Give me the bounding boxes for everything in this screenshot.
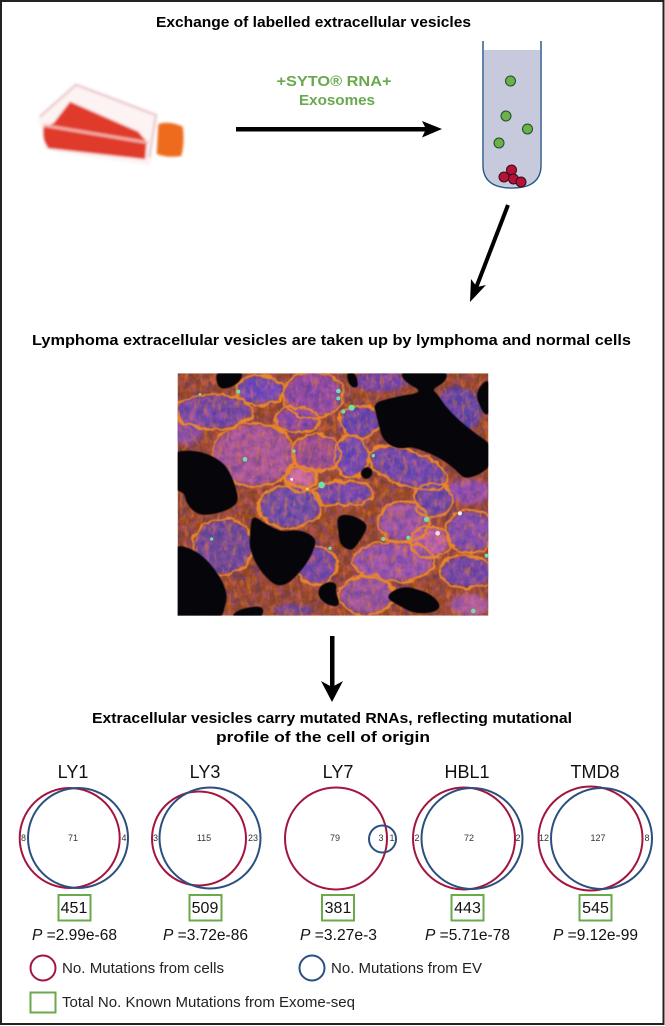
heading: mutated RNAs: Extracellular vesicles carry mutated RNAs, reflecting mutational	[92, 710, 572, 727]
venn diagram: LY3: 115	[197, 833, 211, 843]
venn diagram: LY7: 3	[378, 833, 384, 843]
venn diagram: LY3: 23	[248, 833, 258, 843]
panel: LY1: P =2.99e-68	[32, 927, 117, 944]
legend: exome-seq: Total No. Known Mutations from Exome-seq	[62, 994, 355, 1011]
arrow: micrograph to results	[321, 636, 343, 702]
panel: LY7: 381	[325, 900, 351, 917]
panel: HBL1: P =5.71e-78	[425, 927, 510, 944]
legend	[30, 956, 482, 1012]
heading: uptake: Lymphoma extracellular vesicles are taken up by lymphoma and normal cells	[32, 332, 631, 349]
panel: LY3: P =3.72e-86	[163, 927, 248, 944]
panel: LY7: P =3.27e-3	[300, 927, 377, 944]
label: SYTO RNA exosomes	[276, 73, 392, 109]
panel: LY1: 451	[61, 900, 87, 917]
heading: mutated RNAs: profile of the cell of origin	[216, 729, 430, 746]
venn diagram: LY7	[285, 788, 396, 890]
legend: cells: No. Mutations from cells	[62, 960, 224, 977]
panel: TMD8: 545	[582, 900, 609, 917]
micrograph: cells with vesicle uptake	[170, 372, 494, 618]
title: exchange of vesicles: Exchange of labelled extracellular vesicles	[156, 14, 471, 31]
legend: cells	[30, 956, 224, 980]
venn diagram: HBL1: 2	[414, 833, 420, 843]
venn diagram: TMD8: 8	[644, 833, 650, 843]
venn diagram: HBL1: 2	[515, 833, 521, 843]
venn diagram: LY7: 1	[389, 833, 395, 843]
venn diagram: LY7: 79	[330, 833, 340, 843]
venn diagram: LY1: 71	[68, 833, 78, 843]
legend: EV: No. Mutations from EV	[331, 960, 482, 977]
venn diagram: LY3	[152, 788, 260, 888]
panel: LY3: LY3	[190, 762, 220, 782]
heading: mutated RNAs	[92, 710, 572, 746]
panel: TMD8: P =9.12e-99	[553, 927, 638, 944]
venn diagram: TMD8: 12	[539, 833, 549, 843]
venn diagram: LY1: 8	[21, 833, 26, 843]
legend: EV	[300, 956, 482, 980]
label: SYTO RNA exosomes: Exosomes	[299, 92, 375, 109]
venn diagram: TMD8	[538, 786, 652, 890]
venn diagram: LY3: 3	[153, 833, 158, 843]
label: SYTO RNA exosomes: +SYTO® RNA+	[276, 73, 392, 90]
panel: LY7	[285, 762, 396, 944]
arrow: tube to micrograph	[470, 205, 508, 302]
panel: LY1: LY1	[58, 762, 88, 782]
venn diagram: HBL1: 72	[464, 833, 474, 843]
panel: LY3: 509	[192, 900, 218, 917]
panel: HBL1: 443	[454, 900, 481, 917]
venn diagram: LY1: 4	[121, 833, 127, 843]
panel: LY7: LY7	[323, 762, 353, 782]
venn diagram: LY1	[20, 788, 128, 888]
panel: TMD8	[538, 762, 652, 944]
arrow: flask to tube	[236, 121, 442, 138]
panel: LY3	[152, 762, 260, 944]
venn diagram: HBL1	[413, 788, 522, 890]
panel: TMD8: TMD8	[570, 762, 620, 782]
panel: HBL1	[413, 762, 522, 944]
panel: HBL1: HBL1	[444, 762, 490, 782]
panel: LY1	[20, 762, 128, 944]
icon: culture flask	[38, 84, 184, 165]
icon: test tube with vesicles	[483, 41, 541, 188]
venn diagram: TMD8: 127	[590, 833, 606, 843]
